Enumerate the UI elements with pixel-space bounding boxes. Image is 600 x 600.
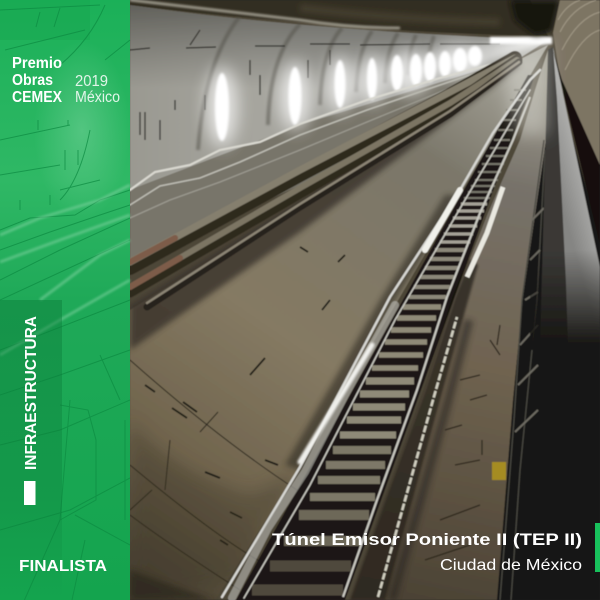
left rail with water reflection bbox=[222, 70, 540, 598]
green accent bar bbox=[595, 523, 600, 572]
award year and country: México bbox=[75, 89, 120, 106]
dark shadow under pipes bbox=[130, 60, 520, 350]
blueprint line texture bbox=[0, 5, 130, 600]
pale wavy bands bbox=[0, 185, 130, 355]
award title: CEMEX bbox=[12, 89, 63, 106]
finalist label: FINALISTA bbox=[19, 558, 107, 575]
yellow junction box bbox=[492, 462, 506, 480]
right tunnel wall bbox=[553, 0, 600, 165]
black wall shadow bbox=[553, 50, 600, 245]
cable bundles on wall bbox=[130, 58, 515, 218]
award title: Obras bbox=[12, 72, 53, 89]
project name: Túnel Emisor Poniente II (TEP II) bbox=[272, 530, 582, 549]
award year and country: 2019 bbox=[75, 73, 108, 90]
tunnel wall with arches bbox=[130, 5, 548, 265]
concrete floor left of track bbox=[130, 45, 548, 600]
award title bbox=[12, 55, 63, 106]
far tunnel haze bbox=[500, 42, 550, 135]
ceiling bbox=[130, 0, 560, 36]
grey conveyor belt bbox=[530, 47, 600, 350]
right side concrete and drainage strip bbox=[350, 50, 548, 600]
project location: Ciudad de México bbox=[440, 557, 582, 574]
category marker bbox=[24, 481, 36, 505]
category label: INFRAESTRUCTURA bbox=[23, 316, 40, 470]
dark conveyor structure bbox=[497, 60, 600, 600]
railway track bed bbox=[236, 75, 535, 600]
wall lights bbox=[206, 37, 552, 147]
award year and country bbox=[75, 73, 120, 106]
award title: Premio bbox=[12, 55, 62, 72]
dark lower left band bbox=[0, 300, 62, 600]
right rail bbox=[343, 97, 530, 597]
track sleepers bbox=[252, 90, 526, 590]
green side panel bbox=[0, 0, 130, 600]
pipes along wall bbox=[130, 58, 519, 307]
